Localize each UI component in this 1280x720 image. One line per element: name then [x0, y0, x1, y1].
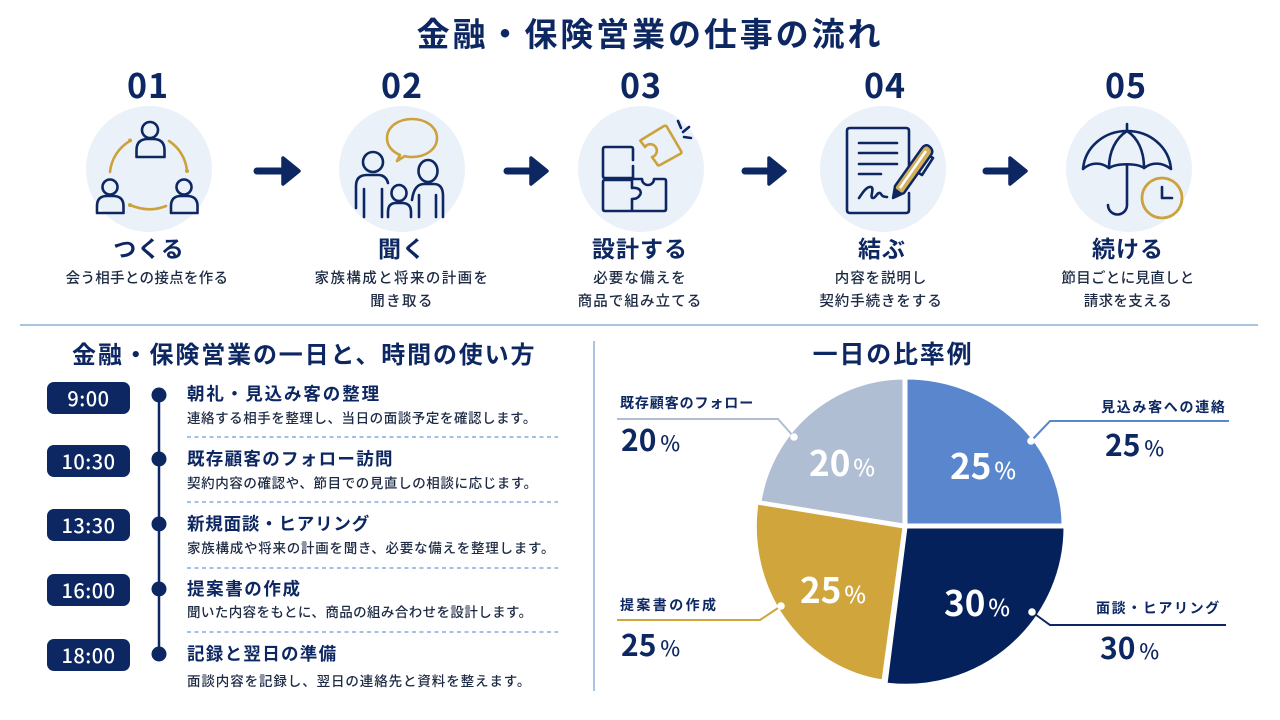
step 3 description: 商品で組み立てる — [578, 290, 702, 311]
pie value: proposal: 25% — [800, 563, 866, 614]
step 2 description — [315, 267, 489, 311]
task title 4: 提案書の作成 — [187, 576, 302, 601]
step 1 description: 会う相手との接点を作る — [66, 267, 228, 288]
time 9:00: 9:00 — [67, 383, 110, 412]
step 3 number: 03 — [620, 59, 662, 108]
arrow 4 — [986, 158, 1026, 184]
step 3 description — [578, 267, 702, 311]
leader line: proposal — [617, 602, 785, 620]
step 5 heading: 続ける — [1092, 230, 1164, 264]
time 10:30 — [47, 445, 130, 477]
value: hearing: 30% — [1100, 624, 1159, 668]
time 10:30: 10:30 — [61, 446, 116, 475]
value: proposal: 25% — [621, 621, 680, 665]
pie value: contact: 25% — [950, 439, 1016, 490]
task description 5: 面談内容を記録し、翌日の連絡先と資料を整えます。 — [187, 670, 531, 690]
step 3 heading: 設計する — [592, 230, 688, 264]
step 1 heading: つくる — [113, 230, 185, 264]
step 4 description — [819, 267, 943, 311]
leader line: hearing — [1028, 608, 1226, 625]
icon: family with speech bubble — [339, 106, 465, 232]
step 5 description — [1061, 267, 1195, 311]
step 4 description: 内容を説明し — [835, 267, 927, 288]
step 5 description: 節目ごとに見直しと — [1061, 267, 1195, 288]
icon: contract and pen — [820, 106, 946, 232]
icon: umbrella and clock — [1066, 106, 1192, 232]
task description 2: 契約内容の確認や、節目での見直しの相談に応じます。 — [187, 472, 538, 492]
label: proposal: 提案書の作成 — [620, 595, 718, 615]
task description 3: 家族構成や将来の計画を聞き、必要な備えを整理します。 — [187, 537, 555, 557]
timeline — [47, 381, 558, 690]
time 13:30 — [47, 509, 130, 541]
step 4 heading: 結ぶ — [858, 230, 906, 264]
value: follow-up: 20% — [621, 416, 680, 460]
time 16:00 — [47, 574, 130, 606]
pie value: hearing: 30% — [944, 576, 1010, 627]
pie value: follow-up: 20% — [809, 436, 875, 487]
value: contact: 25% — [1105, 421, 1164, 465]
step 2 heading: 聞く — [378, 230, 426, 264]
time 9:00 — [47, 382, 130, 414]
step 5 number: 05 — [1105, 59, 1147, 108]
arrow 3 — [745, 158, 785, 184]
step 2 description: 聞き取る — [370, 290, 434, 311]
step 4 number: 04 — [864, 59, 906, 108]
icon: puzzle pieces — [578, 106, 704, 232]
time 16:00: 16:00 — [61, 575, 116, 604]
step 5 description: 請求を支える — [1084, 290, 1172, 311]
step 3 description: 必要な備えを — [593, 267, 687, 288]
icon: people connecting in a cycle — [86, 106, 212, 232]
step 2 description: 家族構成と将来の計画を — [315, 267, 489, 288]
leader line: follow-up — [617, 419, 798, 441]
task title 1: 朝礼・見込み客の整理 — [187, 381, 381, 406]
task title 2: 既存顧客のフォロー訪問 — [187, 446, 394, 471]
time 18:00 — [47, 639, 130, 671]
step 1 number: 01 — [127, 59, 169, 108]
pie slices — [755, 378, 1065, 685]
step 4 description: 契約手続きをする — [819, 290, 943, 311]
label: follow-up: 既存顧客のフォロー — [620, 393, 754, 413]
step 2 number: 02 — [381, 59, 423, 108]
time 18:00: 18:00 — [61, 640, 116, 669]
arrow 2 — [507, 158, 547, 184]
schedule heading: 金融・保険営業の一日と、時間の使い方 — [72, 335, 536, 370]
pie heading: 一日の比率例 — [813, 335, 973, 371]
task description 4: 聞いた内容をもとに、商品の組み合わせを設計します。 — [187, 601, 532, 621]
label: hearing: 面談・ヒアリング — [1096, 598, 1221, 618]
leader line: contact — [1027, 421, 1229, 445]
arrow 1 — [257, 158, 299, 184]
task title 3: 新規面談・ヒアリング — [187, 511, 370, 536]
task description 1: 連絡する相手を整理し、当日の面談予定を確認します。 — [187, 407, 537, 427]
label: contact: 見込み客への連絡 — [1101, 397, 1227, 417]
title: 金融・保険営業の仕事の流れ — [417, 8, 883, 56]
time 13:30: 13:30 — [61, 510, 116, 539]
task title 5: 記録と翌日の準備 — [187, 641, 337, 666]
timeline line and dots — [152, 388, 166, 662]
